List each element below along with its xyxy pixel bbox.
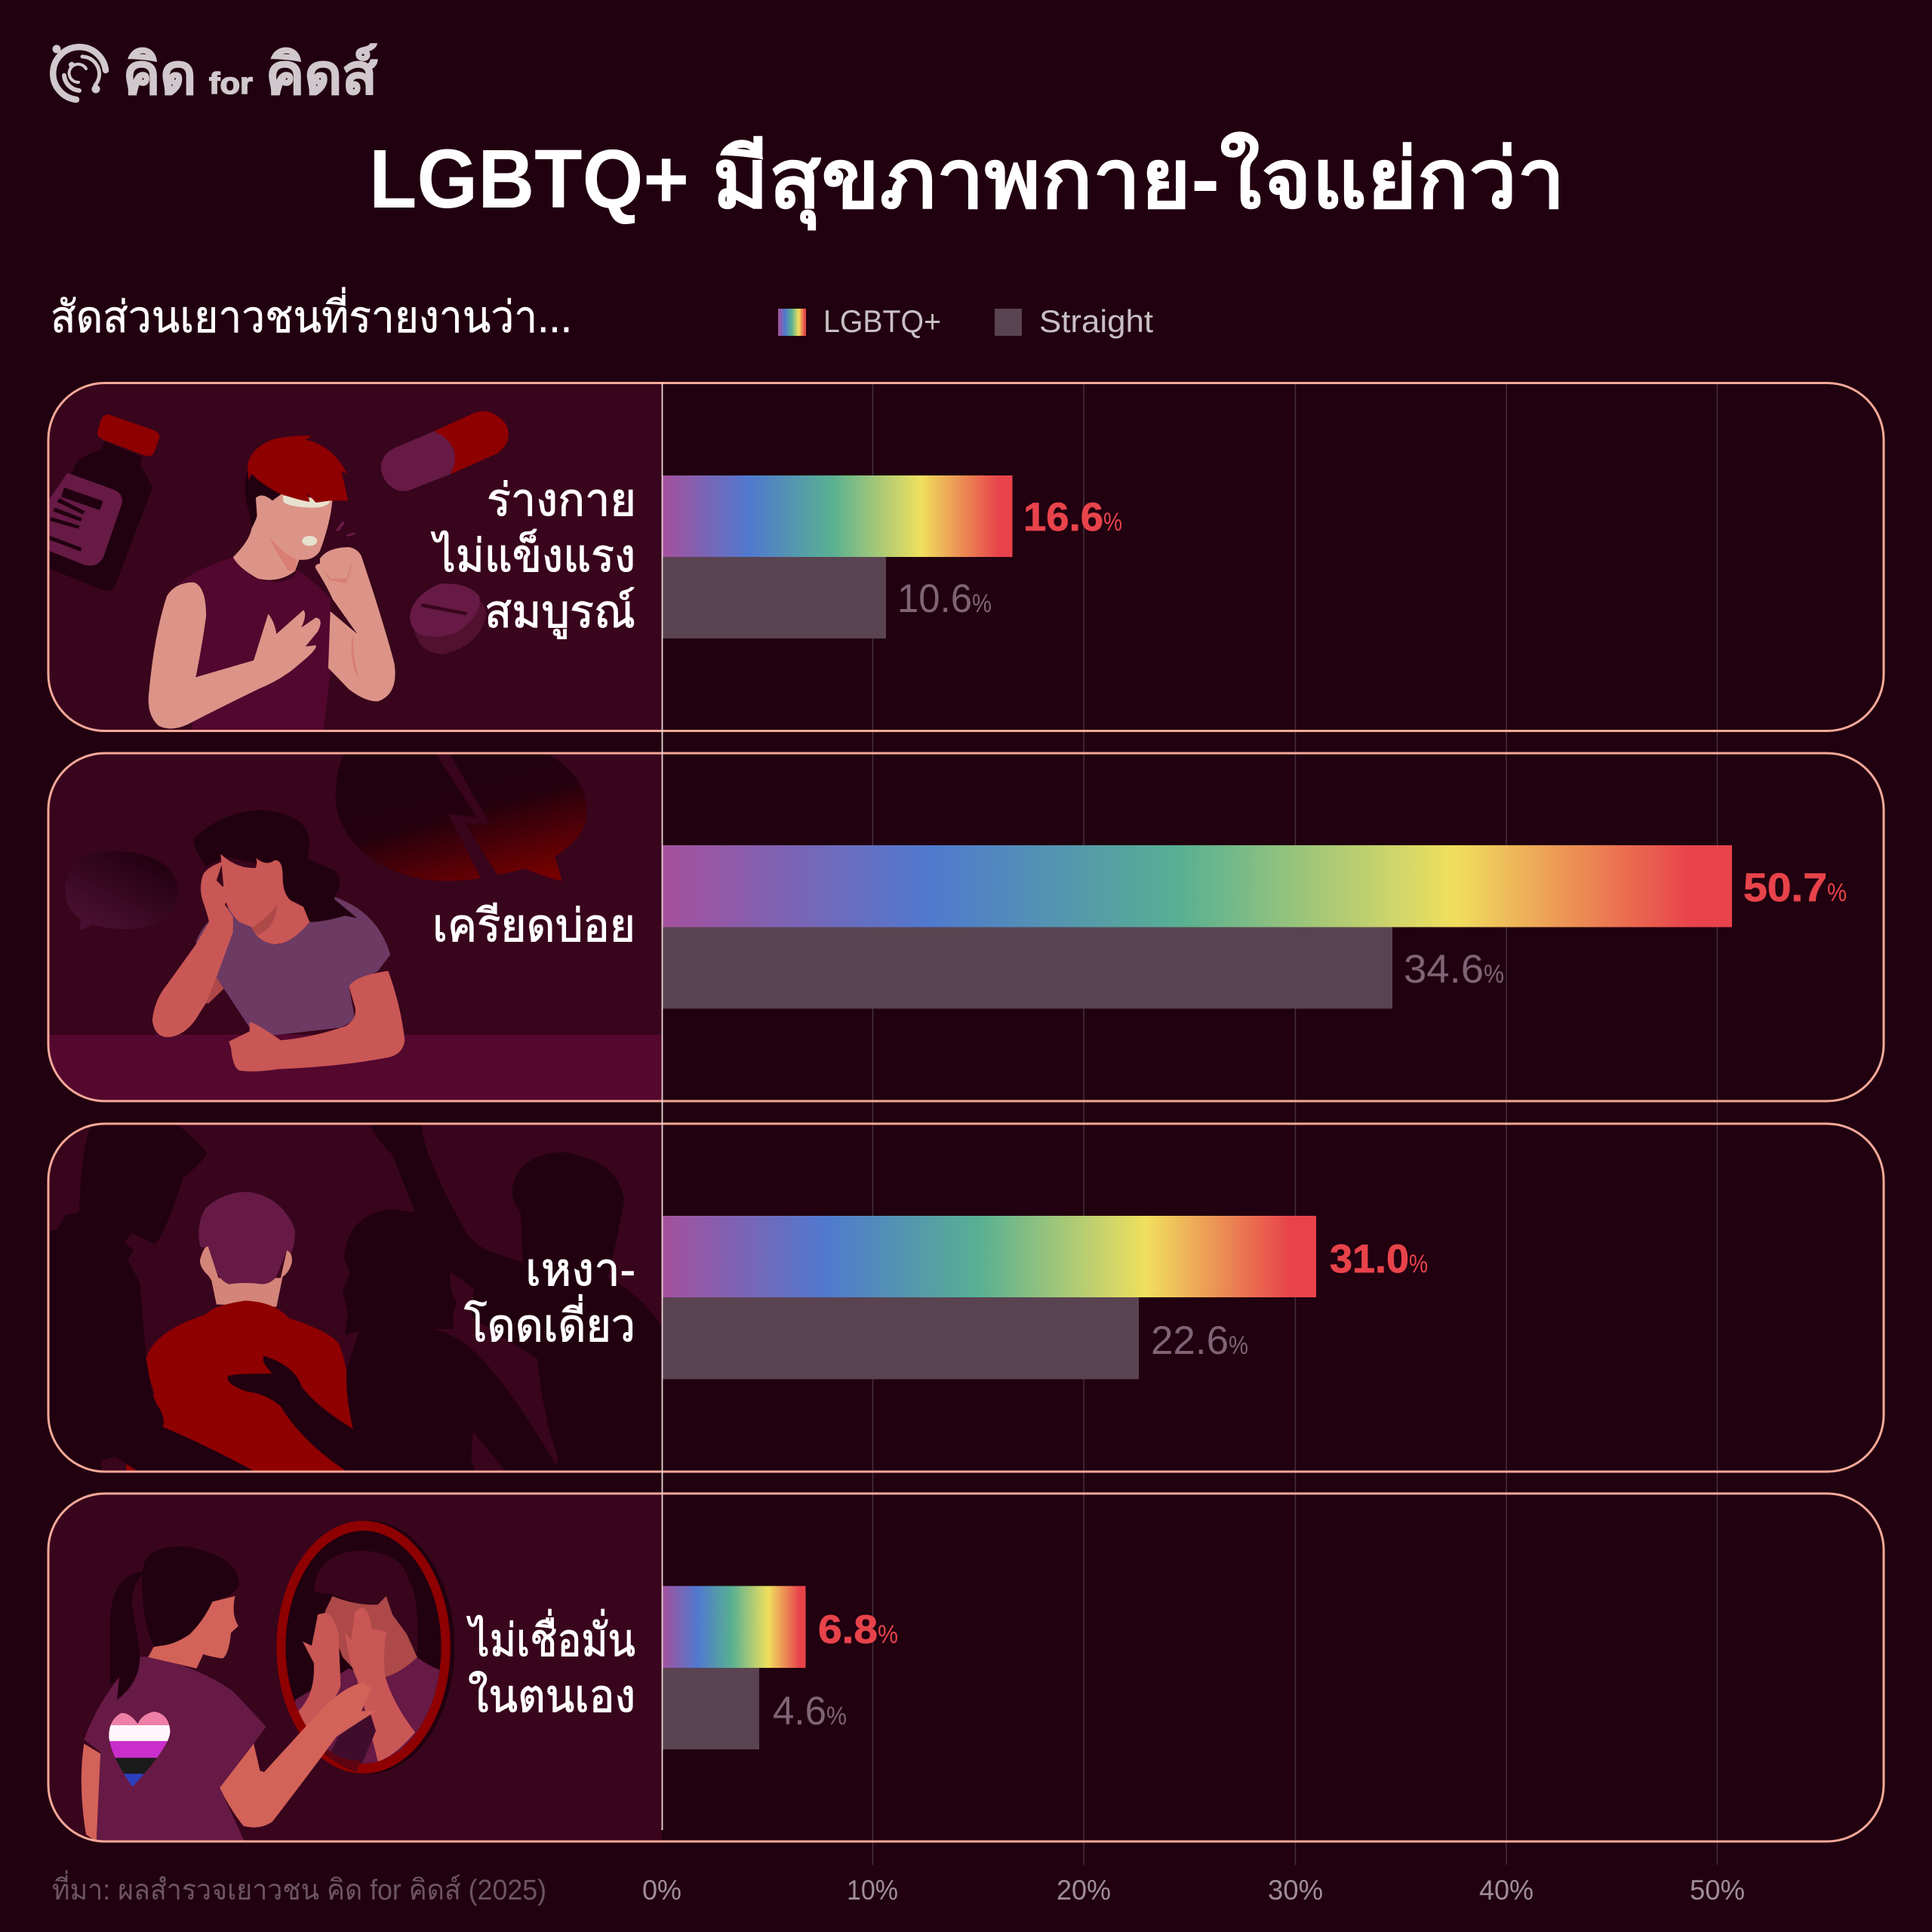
illustration: lonely person among silhouettes <box>30 1122 662 1474</box>
panel: เครียดบ่อย <box>30 751 1884 1110</box>
legend item: Straight <box>995 303 1153 339</box>
value: 34.6%: 34.6 <box>1404 947 1484 992</box>
value: 50.7%: 50.7 <box>1743 866 1827 910</box>
panel border <box>48 1124 1884 1472</box>
bar: LGBTQ+ 31.0% <box>662 1216 1316 1297</box>
grid lines <box>872 383 1718 1865</box>
panel border <box>48 383 1884 731</box>
illustration: coughing man with medicine <box>30 383 662 731</box>
value: 10.6%: % <box>972 589 992 618</box>
bar: Straight 34.6% <box>662 927 1392 1008</box>
illustration: stressed woman at table <box>50 755 662 1100</box>
panel border <box>48 1494 1884 1841</box>
bar: LGBTQ+ 16.6% <box>662 475 1013 557</box>
panel border <box>48 753 1884 1101</box>
axis labels: 30% <box>1268 1875 1323 1906</box>
bar: Straight 4.6% <box>662 1668 759 1749</box>
value: 10.6%: 10.6 <box>897 577 972 621</box>
table <box>50 1035 661 1100</box>
figure: coughing man <box>149 435 395 731</box>
subtitle: สัดส่วนเยาวชนที่รายงานว่า... <box>51 287 572 342</box>
axis line <box>661 383 663 1830</box>
row label: ไม่แข็งแรง <box>431 529 635 581</box>
title: LGBTQ+ <box>369 133 689 226</box>
icon: tablet <box>410 583 486 654</box>
wordmark <box>123 43 378 106</box>
bar: LGBTQ+ 50.7% <box>662 845 1732 927</box>
bar: LGBTQ+ 6.8% <box>662 1586 806 1668</box>
row label: โดดเดี่ยว <box>464 1294 635 1351</box>
wordmark: คิดส์ <box>266 43 378 106</box>
silhouette: right figures <box>228 1122 662 1474</box>
bar: Straight 10.6% <box>662 557 886 638</box>
axis labels: 20% <box>1057 1875 1111 1906</box>
value: 4.6%: % <box>826 1702 847 1730</box>
value: 34.6%: % <box>1484 960 1504 989</box>
value: 22.6%: % <box>1229 1331 1248 1360</box>
axis labels: 0% <box>642 1875 681 1906</box>
source note: ที่มา: ผลสำรวจเยาวชน คิด for คิดส์ (2025) <box>52 1870 546 1906</box>
legend item: Straight: Straight <box>1039 303 1153 339</box>
icon: pride heart <box>109 1712 171 1787</box>
icon: mirror <box>276 1520 454 1774</box>
panel: เหงา-โดดเดี่ยว <box>30 1122 1884 1474</box>
value: 50.7%: % <box>1827 878 1847 907</box>
row label: ในตนเอง <box>468 1671 635 1721</box>
axis labels: 50% <box>1690 1875 1745 1906</box>
row label: ไม่เชื่อมั่น <box>466 1609 635 1666</box>
row label: ร่างกาย <box>487 475 636 525</box>
row label: สมบูรณ์ <box>485 586 635 639</box>
gap between silhouettes <box>432 1272 558 1466</box>
figure: woman holding her face <box>152 810 405 1072</box>
title: มีสุขภาพกาย-ใจแย่กว่า <box>712 131 1565 231</box>
panel: ไม่เชื่อมั่นในตนเอง <box>48 1494 1884 1842</box>
icon: broken speech bubble <box>336 751 587 881</box>
icon: medicine bottle <box>50 414 160 590</box>
bar: Straight 22.6% <box>662 1297 1139 1380</box>
row label: เครียดบ่อย <box>432 900 635 951</box>
value: 22.6%: 22.6 <box>1151 1318 1229 1363</box>
silhouette: left figure <box>50 1124 254 1470</box>
row label: เหงา- <box>525 1244 635 1295</box>
title <box>369 131 1565 231</box>
value: 6.8% <box>818 1607 898 1652</box>
value: 6.8%: % <box>878 1620 898 1649</box>
row label <box>464 1244 635 1351</box>
wordmark: คิด <box>123 43 196 106</box>
icon: capsule <box>381 411 509 491</box>
value: 16.6%: 16.6 <box>1023 495 1103 540</box>
icon: small speech bubble <box>66 851 178 931</box>
illustration: girl at mirror <box>48 1494 662 1842</box>
value: 4.6%: 4.6 <box>773 1689 826 1734</box>
value: 31.0%: 31.0 <box>1330 1237 1409 1281</box>
figure: person seen from behind <box>126 1192 353 1474</box>
value: 6.8%: 6.8 <box>818 1607 878 1652</box>
row label <box>466 1609 635 1721</box>
wordmark: for <box>209 67 253 100</box>
logo: คิด for คิดส์ <box>53 43 378 106</box>
value: 16.6%: % <box>1103 508 1122 537</box>
legend item: LGBTQ+ <box>778 303 941 339</box>
row label <box>431 475 636 639</box>
legend <box>778 303 1153 339</box>
legend item: LGBTQ+: LGBTQ+ <box>823 303 941 339</box>
icon: spiral logo mark <box>53 45 106 100</box>
panel: ร่างกายไม่แข็งแรงสมบูรณ์ <box>30 383 1884 731</box>
axis labels: 10% <box>847 1875 898 1906</box>
axis labels <box>642 1875 1745 1906</box>
axis labels: 40% <box>1479 1875 1534 1906</box>
figure: girl with ponytail <box>82 1546 376 1841</box>
value: 31.0%: % <box>1409 1250 1428 1278</box>
